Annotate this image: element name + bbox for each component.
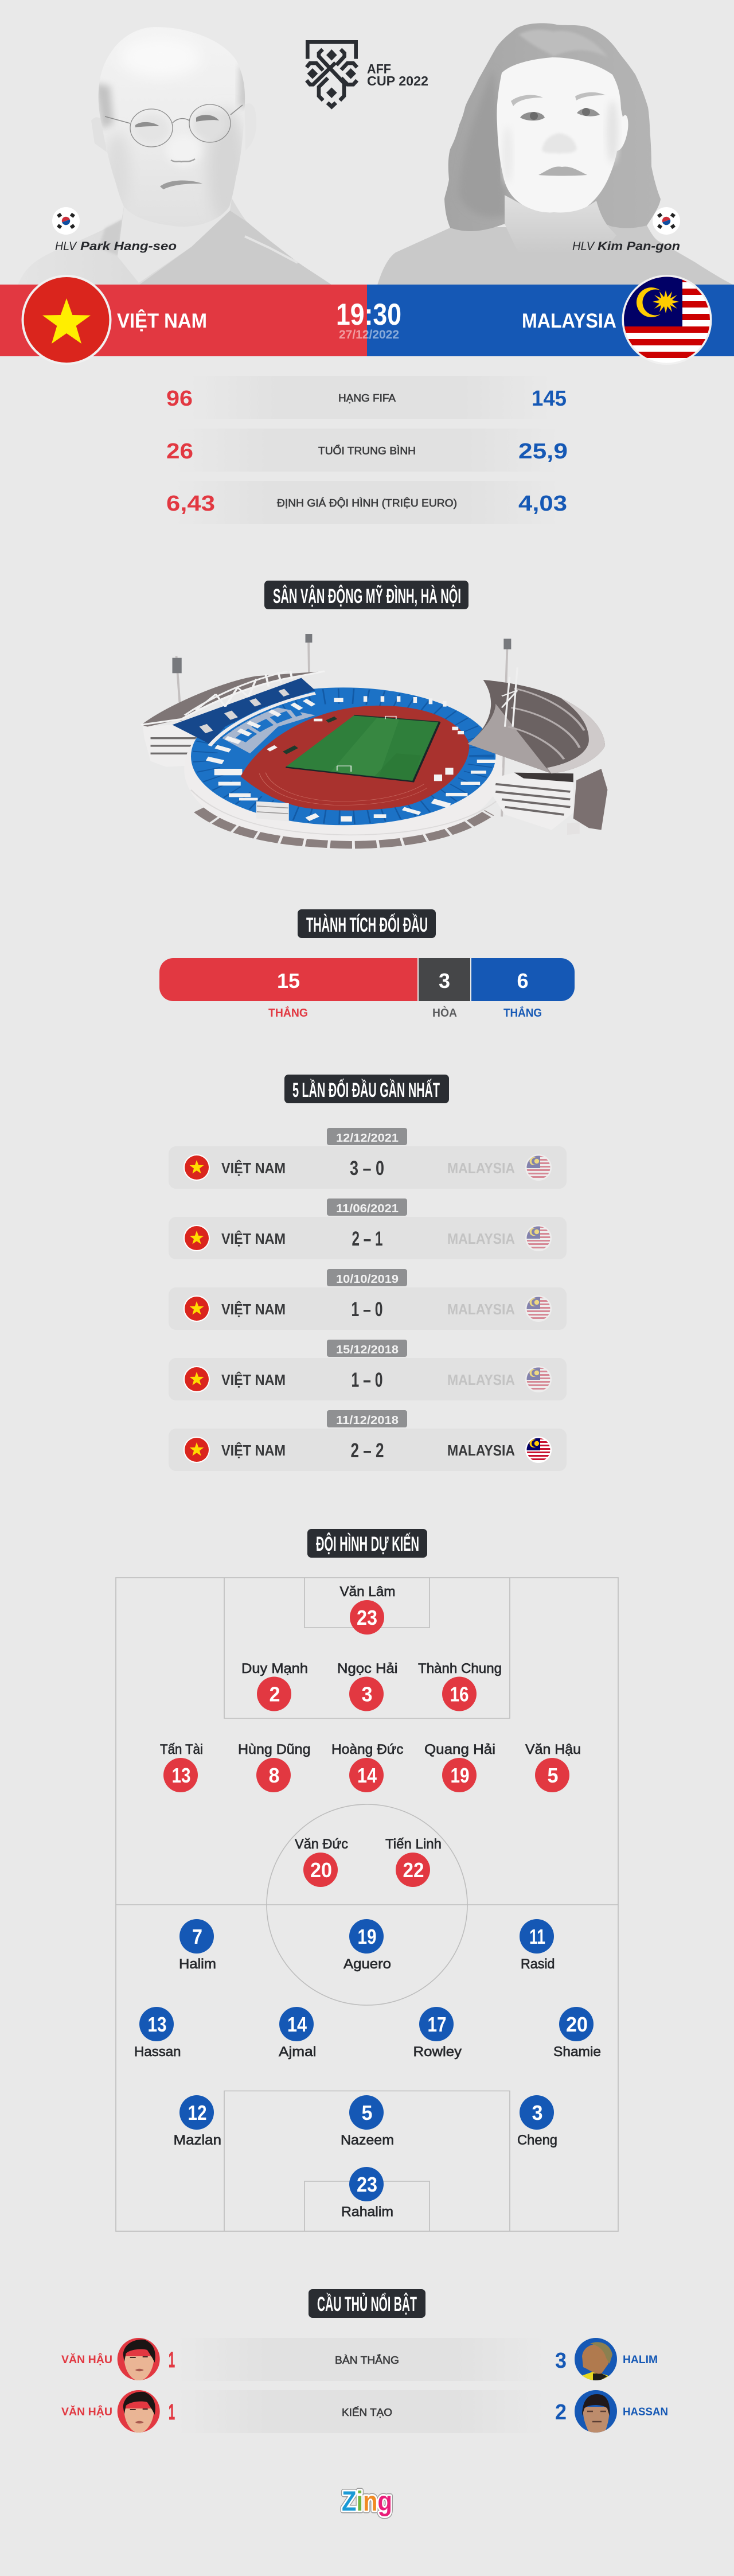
- player Văn Đức: Văn Đức: [295, 1836, 348, 1852]
- match 15/12/2018: 15/12/2018: [336, 1344, 399, 1356]
- heading: stadium: SÂN VẬN ĐỘNG MỸ ĐÌNH, HÀ NỘI: [273, 585, 461, 608]
- player Halim: Halim: [179, 1956, 216, 1972]
- player Thành Chung: [418, 1661, 502, 1711]
- match 11/12/2018: VIỆT NAM: [221, 1442, 286, 1459]
- player Cheng: 3: [532, 2101, 542, 2124]
- player Văn Hậu: 5: [547, 1764, 559, 1787]
- player Rahalim: Rahalim: [341, 2204, 393, 2220]
- match 10/10/2019: [169, 1269, 567, 1330]
- player Thành Chung: Thành Chung: [418, 1661, 502, 1676]
- player Cheng: [517, 2095, 557, 2148]
- player Rasid: [520, 1919, 555, 1972]
- row: goals: [61, 2338, 658, 2382]
- row: goals: HALIM: [623, 2354, 658, 2366]
- heading: standout players: [309, 2289, 425, 2318]
- legend labels: HÒA: [432, 1006, 457, 1019]
- avatar: Halim: [575, 2338, 617, 2382]
- row: assists: [61, 2390, 668, 2433]
- row: assists: HASSAN: [623, 2406, 668, 2418]
- player Tấn Tài: 13: [172, 1764, 190, 1787]
- lineup: Việt Nam: [160, 1584, 581, 1887]
- player Rahalim: [341, 2167, 393, 2220]
- player Duy Mạnh: 2: [270, 1682, 280, 1706]
- heading: stadium: [264, 581, 468, 609]
- concrete ring: [184, 688, 502, 849]
- match 11/06/2021: 2 – 1: [352, 1228, 383, 1250]
- player Rowley: Rowley: [413, 2044, 462, 2060]
- illustration: Mỹ Đình stadium: [141, 634, 607, 849]
- player Rowley: 17: [428, 2013, 446, 2036]
- caption: HLV Park Hang-seo: Park Hang-seo: [80, 240, 177, 253]
- player Tiến Linh: [385, 1836, 442, 1887]
- player Mazlan: 12: [188, 2101, 206, 2124]
- match 12/12/2021: MALAYSIA: [447, 1159, 515, 1177]
- player Aguero: 19: [358, 1925, 376, 1948]
- stat: average age: [166, 439, 568, 464]
- player Hoàng Đức: 14: [357, 1764, 377, 1787]
- logo: AFF Cup 2022: [307, 42, 428, 110]
- logo: Zing: Zing: [342, 2486, 392, 2517]
- player Duy Mạnh: [241, 1661, 308, 1711]
- match 15/12/2018: MALAYSIA: [447, 1371, 515, 1388]
- player Halim: 7: [192, 1925, 202, 1948]
- player Nazeem: Nazeem: [341, 2133, 394, 2148]
- stat: squad value: [166, 492, 567, 516]
- icon: Malaysia flag: [622, 275, 714, 367]
- match 11/06/2021: [169, 1198, 567, 1259]
- match 12/12/2021: 12/12/2021: [336, 1132, 399, 1145]
- row: goals: 1: [169, 2348, 175, 2372]
- stats comparison: [166, 376, 568, 524]
- stat: squad value: ĐỊNH GIÁ ĐỘI HÌNH (TRIỆU EURO): [277, 497, 457, 509]
- player Hoàng Đức: Hoàng Đức: [331, 1742, 404, 1757]
- stat: average age: 25,9: [518, 439, 568, 464]
- heading: last 5 meetings: 5 LẦN ĐỐI ĐẦU GẦN NHẤT: [292, 1079, 440, 1102]
- player Hassan: Hassan: [134, 2044, 181, 2060]
- player Ngọc Hải: 3: [361, 1682, 373, 1706]
- pitch lines: [116, 1578, 618, 2231]
- left upper stand: [172, 678, 315, 744]
- left roof: [141, 671, 325, 727]
- player Hùng Dũng: 8: [268, 1764, 280, 1787]
- match 11/06/2021: MALAYSIA: [447, 1230, 515, 1247]
- player Hùng Dũng: [238, 1742, 311, 1792]
- row: goals: 3: [555, 2349, 567, 2373]
- player Ajmal: Ajmal: [279, 2044, 317, 2060]
- row: goals: BÀN THẮNG: [335, 2354, 399, 2366]
- match date: 27/12/2022: [339, 328, 399, 341]
- scoreboard block: [256, 801, 289, 822]
- player Ngọc Hải: Ngọc Hải: [337, 1661, 398, 1676]
- legend labels: [268, 1006, 542, 1019]
- player Rowley: [413, 2007, 462, 2060]
- match 11/06/2021: VIỆT NAM: [221, 1230, 286, 1247]
- stat: FIFA ranking: HẠNG FIFA: [338, 392, 396, 404]
- caption: HLV Kim Pan-gon: HLV: [572, 240, 595, 253]
- stat: average age: TUỔI TRUNG BÌNH: [318, 445, 416, 457]
- player Nazeem: 5: [361, 2101, 373, 2124]
- chart: head-to-head bar: 3: [439, 969, 450, 993]
- stat: squad value: 6,43: [166, 492, 215, 516]
- player Cheng: Cheng: [517, 2133, 557, 2148]
- player Aguero: Aguero: [343, 1956, 391, 1972]
- heading: predicted lineup: ĐỘI HÌNH DỰ KIẾN: [316, 1532, 419, 1555]
- legend labels: THẮNG: [503, 1006, 542, 1019]
- player Ajmal: [279, 2007, 317, 2060]
- floodlights: [177, 635, 507, 816]
- kick-off time: 19:30: [336, 298, 401, 332]
- flag: South Korea, Kim: [653, 207, 680, 235]
- right roof: [467, 680, 605, 773]
- player Tấn Tài: Tấn Tài: [160, 1742, 203, 1757]
- heading: predicted lineup: [307, 1529, 427, 1558]
- match 10/10/2019: 10/10/2019: [336, 1273, 399, 1286]
- player Văn Đức: [295, 1836, 348, 1887]
- caption: HLV Kim Pan-gon: [572, 240, 680, 253]
- player Nazeem: [341, 2095, 394, 2148]
- match 11/12/2018: 2 – 2: [351, 1439, 384, 1462]
- avatar: Văn Hậu: [118, 2338, 160, 2381]
- portrait: coach Park Hang-seo: [61, 27, 331, 285]
- caption: HLV Park Hang-seo: [55, 240, 177, 253]
- player Halim: [179, 1919, 216, 1972]
- team name: Malaysia: MALAYSIA: [522, 310, 616, 332]
- match 11/12/2018: 11/12/2018: [336, 1414, 399, 1427]
- row: assists: 1: [169, 2400, 175, 2425]
- match 10/10/2019: VIỆT NAM: [221, 1301, 286, 1318]
- match 12/12/2021: 3 – 0: [350, 1157, 384, 1180]
- match 15/12/2018: VIỆT NAM: [221, 1371, 286, 1388]
- match 10/10/2019: MALAYSIA: [447, 1301, 515, 1318]
- chart: head-to-head bar: 15: [277, 969, 300, 993]
- match 15/12/2018: [169, 1340, 567, 1400]
- player Mazlan: [173, 2095, 221, 2148]
- player Aguero: [343, 1919, 391, 1972]
- seating bowl: [191, 687, 495, 825]
- stat: squad value: 4,03: [518, 492, 567, 516]
- player Rahalim: 23: [357, 2173, 377, 2196]
- heading: last 5 meetings: [284, 1075, 449, 1103]
- player Shamie: 20: [566, 2013, 588, 2036]
- player Shamie: [553, 2007, 601, 2060]
- player Văn Hậu: [525, 1742, 581, 1792]
- heading: standout players: CẦU THỦ NỔI BẬT: [317, 2293, 417, 2316]
- player Rasid: Rasid: [521, 1956, 555, 1972]
- chart: head-to-head bar: 6: [517, 969, 529, 993]
- avatar: Hassan: [575, 2390, 617, 2433]
- player Quang Hải: Quang Hải: [424, 1742, 495, 1757]
- match 11/12/2018: [169, 1410, 567, 1471]
- player Shamie: Shamie: [553, 2044, 601, 2060]
- player Tiến Linh: 22: [403, 1858, 424, 1882]
- player Thành Chung: 16: [450, 1682, 469, 1706]
- chart: head-to-head bar: [159, 958, 575, 1019]
- stat: FIFA ranking: 145: [532, 387, 567, 411]
- match 11/06/2021: 11/06/2021: [336, 1203, 399, 1215]
- logo: Zing: Zing: [342, 2486, 392, 2517]
- stat: FIFA ranking: 96: [166, 387, 193, 411]
- left building: [143, 725, 206, 767]
- heading: head-to-head record: [298, 909, 436, 938]
- player Mazlan: Mazlan: [173, 2133, 221, 2148]
- match banner: [0, 275, 734, 367]
- row: assists: 2: [555, 2400, 567, 2425]
- caption: HLV Park Hang-seo: HLV: [55, 240, 77, 253]
- player Hùng Dũng: Hùng Dũng: [238, 1742, 311, 1757]
- player Ajmal: 14: [287, 2013, 307, 2036]
- logo: AFF Cup 2022: AFF: [367, 61, 391, 76]
- lineup: Malaysia: [134, 1919, 601, 2220]
- stat: average age: 26: [166, 439, 193, 464]
- row: assists: KIẾN TẠO: [342, 2406, 392, 2418]
- player Văn Hậu: Văn Hậu: [525, 1742, 581, 1757]
- player Văn Lâm: 23: [357, 1606, 377, 1629]
- player Quang Hải: [424, 1742, 495, 1792]
- legend labels: THẮNG: [268, 1006, 308, 1019]
- player Rasid: 11: [529, 1925, 545, 1948]
- match 15/12/2018: 1 – 0: [351, 1369, 383, 1391]
- row: goals: VĂN HẬU: [61, 2353, 112, 2366]
- icon: Vietnam flag: [22, 275, 111, 365]
- flag: South Korea, Park: [52, 207, 80, 235]
- team name: Việt Nam: VIỆT NAM: [117, 309, 207, 332]
- running track: [241, 706, 469, 811]
- player Tiến Linh: Tiến Linh: [385, 1836, 442, 1852]
- pitch: [286, 715, 440, 781]
- player Hassan: 13: [148, 2013, 166, 2036]
- player Tấn Tài: [160, 1742, 203, 1792]
- player Hoàng Đức: [331, 1742, 404, 1792]
- portrait: coach Kim Pan-gon: [377, 23, 734, 285]
- match 10/10/2019: 1 – 0: [351, 1298, 383, 1321]
- player Văn Lâm: Văn Lâm: [339, 1584, 396, 1600]
- stat: FIFA ranking: [166, 387, 567, 411]
- player Hassan: [134, 2007, 181, 2060]
- player Ngọc Hải: [337, 1661, 398, 1711]
- row: assists: VĂN HẬU: [61, 2406, 112, 2418]
- caption: HLV Kim Pan-gon: Kim Pan-gon: [598, 240, 680, 253]
- player Văn Đức: 20: [310, 1858, 332, 1882]
- right building: [493, 773, 573, 830]
- player Duy Mạnh: Duy Mạnh: [241, 1661, 308, 1676]
- match 11/12/2018: MALAYSIA: [447, 1442, 515, 1459]
- avatar: Văn Hậu: [118, 2390, 160, 2433]
- player Quang Hải: 19: [451, 1764, 469, 1787]
- logo: AFF Cup 2022: CUP 2022: [367, 73, 428, 88]
- match 12/12/2021: VIỆT NAM: [221, 1159, 286, 1177]
- player Văn Lâm: [339, 1584, 396, 1635]
- match 12/12/2021: [169, 1128, 567, 1189]
- logo: Zing: Zing: [342, 2486, 392, 2517]
- heading: head-to-head record: THÀNH TÍCH ĐỐI ĐẦU: [306, 913, 428, 936]
